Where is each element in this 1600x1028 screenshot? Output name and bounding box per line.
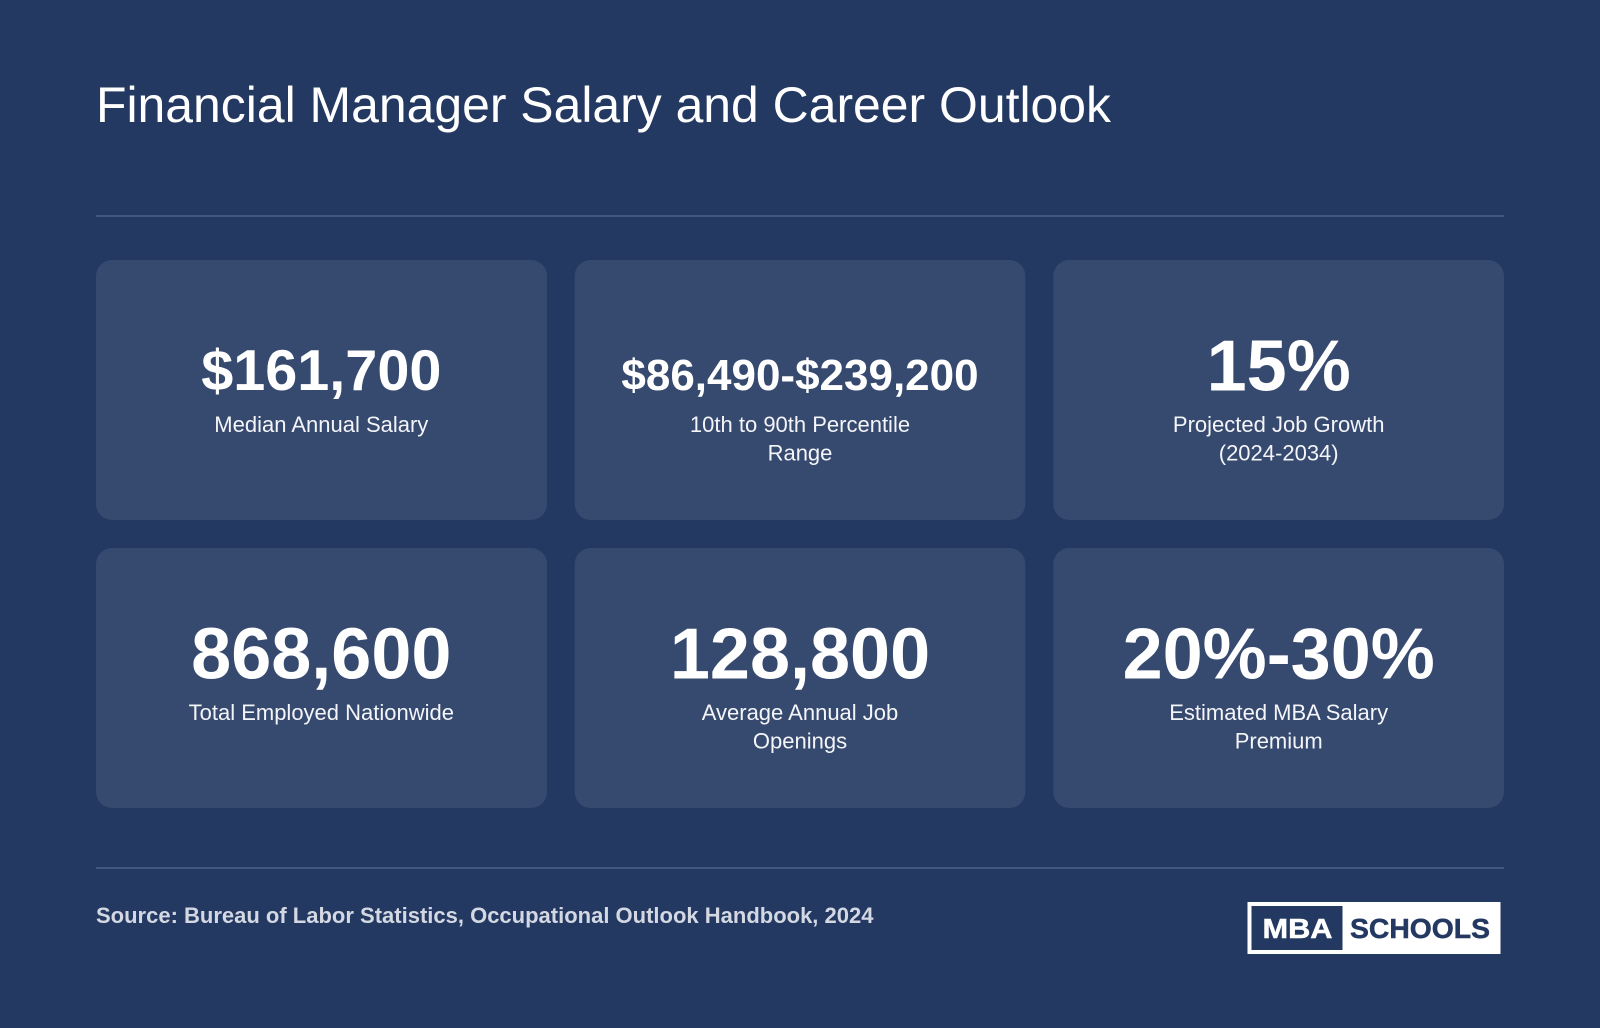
value: job openings: 128,800 — [670, 614, 930, 694]
label: MBA premium: Estimated MBA Salary — [1169, 700, 1388, 725]
label: median salary: Median Annual Salary — [214, 412, 428, 437]
label: job growth: Projected Job Growth — [1173, 412, 1384, 437]
label: job openings: Openings — [753, 729, 847, 754]
logo: MBA Schools: MBA — [1262, 913, 1332, 944]
panel: median annual salary — [96, 260, 547, 520]
label: percentile range: 10th to 90th Percentile — [690, 412, 910, 437]
title: Financial Manager Salary and Career Outlook — [96, 77, 1112, 133]
panel: total employed — [96, 548, 547, 808]
label: job growth: (2024-2034) — [1219, 441, 1339, 466]
value: percentile range: $86,490-$239,200 — [621, 351, 979, 400]
label: percentile range: Range — [768, 441, 832, 466]
panel: percentile range — [575, 260, 1025, 520]
logo: MBA Schools — [1248, 902, 1500, 954]
panel: MBA salary premium — [1053, 548, 1504, 808]
logo: MBA Schools: SCHOOLS — [1350, 913, 1490, 944]
label: total employed: Total Employed Nationwide — [189, 700, 454, 725]
value: total employed: 868,600 — [191, 614, 451, 694]
value: MBA premium: 20%-30% — [1123, 614, 1435, 694]
label: MBA premium: Premium — [1235, 729, 1323, 754]
value: job growth: 15% — [1207, 326, 1351, 406]
panel: annual job openings — [575, 548, 1025, 808]
panel: projected job growth — [1053, 260, 1504, 520]
label: job openings: Average Annual Job — [702, 700, 898, 725]
value: median salary: $161,700 — [201, 339, 441, 403]
source note: Source: Bureau of Labor Statistics, Occupational Outlook Handbook, 2024 — [96, 903, 874, 928]
